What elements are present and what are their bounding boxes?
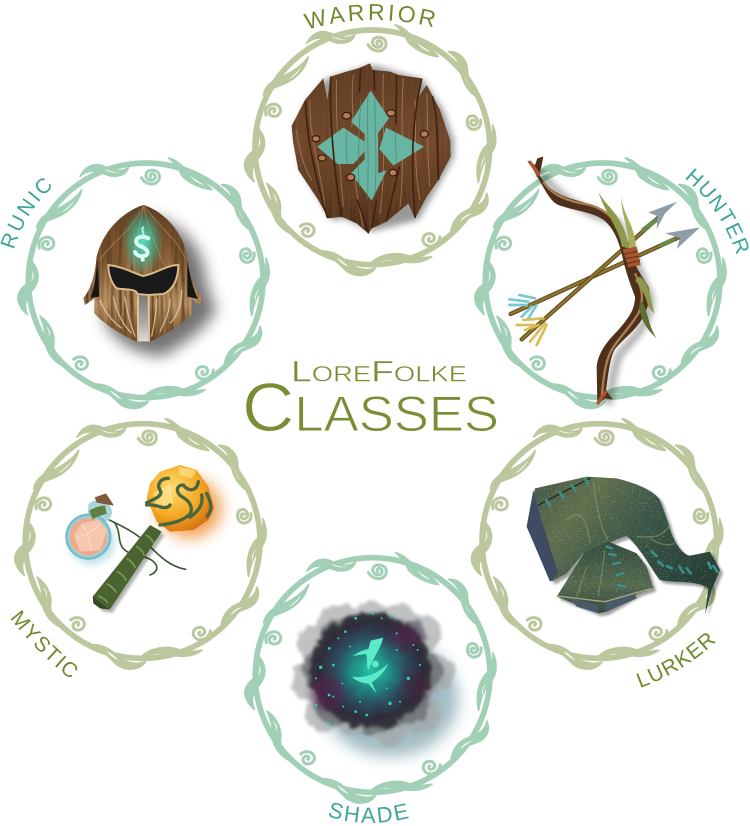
potion bottle: [65, 493, 114, 560]
cloak stitches: [538, 478, 717, 587]
icon: wooden helmet: [83, 205, 217, 357]
title line: LoreFolke: LORE FOLKE: [291, 356, 467, 388]
label: Shade: [328, 802, 409, 823]
label: Warrior: [303, 4, 435, 28]
icon: wooden shield: [292, 63, 454, 233]
ring: warrior: [245, 25, 496, 275]
cloak skirt: [557, 542, 653, 613]
shade rune: [352, 638, 388, 693]
orb: [147, 465, 214, 532]
label: Mystic: MYSTIC: [10, 610, 78, 677]
orb vines: [147, 478, 211, 525]
ring: shade: [245, 553, 496, 803]
cloak body and sleeve: [527, 477, 720, 615]
title line: Classes: CLASSES: [242, 369, 499, 446]
helmet rune: [135, 227, 148, 256]
bow limb: [527, 157, 650, 405]
icon: staff and potion: [65, 465, 222, 613]
label: Lurker: LURKER: [636, 633, 716, 688]
staff: [95, 528, 164, 613]
bow grass wrap: [598, 192, 657, 338]
shield rivets: [312, 110, 428, 181]
title: [242, 356, 499, 446]
icon: hooded cloak: [527, 477, 723, 618]
icon: shadow cloud with rune: [292, 602, 458, 757]
shade sparkles: [315, 612, 421, 725]
ring: mystic: [15, 419, 266, 669]
shield emblem: [317, 91, 424, 201]
arrows: [511, 216, 682, 339]
vine strings: [109, 520, 186, 575]
icon: bow and arrows: [509, 157, 700, 405]
ring: hunter: [475, 158, 726, 408]
ring: lurker: [472, 419, 723, 669]
ring: runic: [18, 158, 269, 408]
